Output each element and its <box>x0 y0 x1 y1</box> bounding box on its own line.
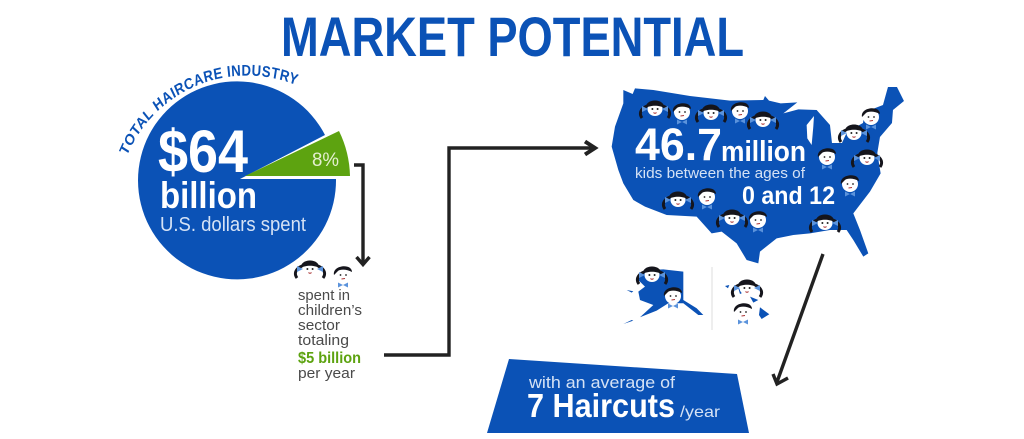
text block: children's sector: per year <box>298 365 355 382</box>
icon group: children on Alaska and Hawaii <box>637 266 762 324</box>
per year label: /year <box>680 404 721 421</box>
panel: haircuts per year <box>487 359 749 433</box>
arrow: map to haircuts <box>773 254 823 384</box>
text block: children's sector <box>298 287 362 382</box>
text block: 46.7 million kids: million <box>721 136 806 168</box>
pie main slice <box>138 81 336 279</box>
7 haircuts figure: 7 Haircuts <box>527 387 675 424</box>
arrow: children's sector to map <box>384 142 595 355</box>
billion label: billion <box>160 175 257 216</box>
pie green slice <box>245 131 350 176</box>
text block: 46.7 million kids: 0 and 12 <box>742 182 835 210</box>
8 percent label: 8% <box>312 150 339 171</box>
icon: children beside sector text <box>295 260 352 288</box>
text block: children's sector: totaling <box>298 332 349 349</box>
title: MARKET POTENTIAL <box>281 5 744 68</box>
dollars spent label: U.S. dollars spent <box>160 214 306 236</box>
divider <box>711 267 713 330</box>
average label: with an average of <box>528 373 675 392</box>
text block: 46.7 million kids: kids between the ages of <box>635 165 806 182</box>
curved heading: TOTAL HAIRCARE INDUSTRY <box>119 64 299 153</box>
icon group: children on the mainland map <box>640 100 882 232</box>
map: Alaska <box>623 269 703 324</box>
text block: children's sector: sector <box>298 317 340 334</box>
map: contiguous United States <box>612 87 904 263</box>
text block: children's sector: children’s <box>298 302 362 319</box>
text block: children's sector: $5 billion <box>298 350 361 367</box>
text block: children's sector: spent in <box>298 287 350 304</box>
lake michigan <box>807 116 814 145</box>
arrow: pie to children's sector <box>354 165 370 264</box>
64 dollars figure: $64 <box>158 118 249 185</box>
panel: haircare pie chart <box>119 64 350 280</box>
text block: 46.7 million kids: 46.7 <box>635 119 722 170</box>
text block: 46.7 million kids <box>635 119 835 210</box>
map: Hawaii <box>725 285 769 319</box>
